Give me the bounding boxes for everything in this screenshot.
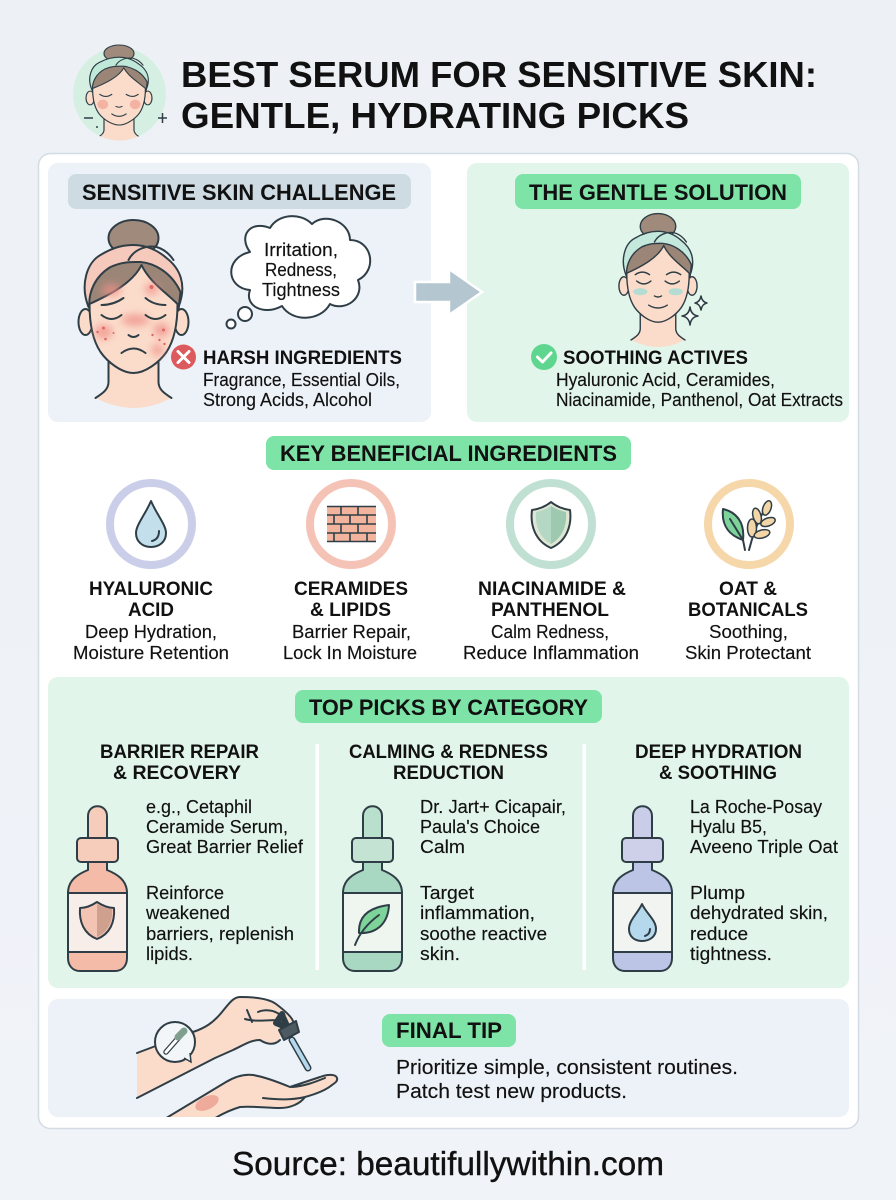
source line: Source: beautifullywithin.com xyxy=(232,1145,664,1182)
thought bubble: irritation, redness, tightness: Redness, xyxy=(265,259,337,280)
thought bubble: irritation, redness, tightness: Tightness xyxy=(262,279,340,300)
column: deep hydration and soothing: Plump xyxy=(690,882,745,903)
ingredient: ceramides and lipids: Lock In Moisture xyxy=(283,642,417,663)
ingredient: ceramides and lipids: CERAMIDES xyxy=(294,578,408,600)
text: final tip advice: Patch test new products. xyxy=(396,1080,627,1103)
column: barrier repair: e.g., Cetaphil xyxy=(146,796,252,817)
column: barrier repair: lipids. xyxy=(146,943,193,964)
column: barrier repair: barriers, replenish xyxy=(146,923,294,944)
icon: header face with headband xyxy=(73,45,167,144)
ingredient: hyaluronic acid: HYALURONIC xyxy=(89,578,213,600)
column: deep hydration and soothing: dehydrated skin, xyxy=(690,902,828,923)
icon: leaf and wheat xyxy=(708,483,790,565)
column: calming and redness reduction: Paula's Choice xyxy=(420,816,540,837)
column: calming and redness reduction: skin. xyxy=(420,943,460,964)
column: barrier repair: & RECOVERY xyxy=(113,762,241,784)
column: deep hydration and soothing: Hyalu B5, xyxy=(690,816,767,837)
title: GENTLE, HYDRATING PICKS xyxy=(181,95,689,136)
column: calming and redness reduction: soothe reactive xyxy=(420,923,547,944)
ingredient: oat and botanicals: Soothing, xyxy=(709,621,788,642)
column: deep hydration and soothing: & SOOTHING xyxy=(659,762,777,784)
panel: final tip xyxy=(48,997,849,1120)
ingredient: ceramides and lipids: Barrier Repair, xyxy=(292,621,411,642)
text: harsh ingredients: HARSH INGREDIENTS xyxy=(203,347,402,369)
text: soothing actives: Hyaluronic Acid, Ceramides, xyxy=(556,369,775,390)
arrow: challenge to solution xyxy=(415,269,482,315)
icon: sparkles xyxy=(682,296,707,325)
column: calming and redness reduction: Dr. Jart+ Cicapair, xyxy=(420,796,566,817)
ingredient: niacinamide and panthenol: Reduce Inflammation xyxy=(463,642,639,663)
ingredient: niacinamide and panthenol: PANTHENOL xyxy=(491,599,609,621)
column: calming and redness reduction: Calm xyxy=(420,836,465,857)
text: final tip advice xyxy=(396,1056,738,1103)
column: deep hydration and soothing: reduce xyxy=(690,923,748,944)
column: calming and redness reduction: REDUCTION xyxy=(393,762,504,784)
column: deep hydration and soothing: Aveeno Triple Oat xyxy=(690,836,838,857)
main card xyxy=(38,154,858,1128)
thought bubble: irritation, redness, tightness xyxy=(226,216,370,328)
ingredient: ceramides and lipids xyxy=(283,483,417,663)
ingredient: hyaluronic acid: Deep Hydration, xyxy=(85,621,217,642)
title xyxy=(181,54,817,136)
column: barrier repair: BARRIER REPAIR xyxy=(100,741,259,763)
column: deep hydration and soothing: tightness. xyxy=(690,943,772,964)
text: harsh ingredients xyxy=(203,347,402,410)
text: harsh ingredients: Strong Acids, Alcohol xyxy=(203,389,372,410)
icon: lavender serum bottle xyxy=(613,806,672,971)
heading: final tip xyxy=(382,1014,516,1047)
icon: irritated face xyxy=(78,220,188,408)
text: final tip advice: Prioritize simple, consistent routines. xyxy=(396,1056,738,1079)
icon: shield xyxy=(510,483,592,565)
title: BEST SERUM FOR SENSITIVE SKIN: xyxy=(181,54,817,95)
heading: key beneficial ingredients xyxy=(266,436,631,470)
column: barrier repair xyxy=(68,741,304,971)
icon: calm face xyxy=(619,214,697,347)
heading: sensitive skin challenge xyxy=(68,174,411,209)
heading: key beneficial ingredients: KEY BENEFICIAL INGREDIENTS xyxy=(280,441,617,466)
text: soothing actives: Niacinamide, Panthenol, Oat Extracts xyxy=(556,389,843,410)
column: barrier repair: weakened xyxy=(145,902,230,923)
text: harsh ingredients: Fragrance, Essential Oils, xyxy=(203,369,400,390)
heading: top picks by category: TOP PICKS BY CATEGORY xyxy=(309,695,588,720)
icon: peach serum bottle xyxy=(68,806,127,971)
text: soothing actives xyxy=(556,347,843,410)
ingredient: oat and botanicals: Skin Protectant xyxy=(685,642,811,663)
column: calming and redness reduction: CALMING & REDNESS xyxy=(349,741,548,763)
ingredient: niacinamide and panthenol xyxy=(463,483,639,663)
column: barrier repair: Ceramide Serum, xyxy=(146,816,288,837)
icon: green serum bottle xyxy=(343,806,402,971)
column: barrier repair: Great Barrier Relief xyxy=(146,836,304,857)
column: deep hydration and soothing: La Roche-Posay xyxy=(690,796,823,817)
ingredient: oat and botanicals: OAT & xyxy=(719,578,777,600)
icon: red x xyxy=(171,344,196,370)
ingredient: ceramides and lipids: & LIPIDS xyxy=(310,599,391,621)
ingredient: niacinamide and panthenol: Calm Redness, xyxy=(491,621,609,642)
heading: final tip: FINAL TIP xyxy=(396,1018,502,1043)
icon: water drop xyxy=(110,483,192,565)
ingredient: niacinamide and panthenol: NIACINAMIDE & xyxy=(478,578,626,600)
ingredient: hyaluronic acid: Moisture Retention xyxy=(73,642,229,663)
column: calming and redness reduction xyxy=(343,741,566,971)
panel: sensitive skin challenge xyxy=(48,163,431,422)
icon: brick wall xyxy=(310,483,392,565)
illustration: hands applying serum xyxy=(137,997,337,1120)
column: calming and redness reduction: Target xyxy=(420,882,474,903)
column: deep hydration and soothing: DEEP HYDRATION xyxy=(635,741,802,763)
ingredient: hyaluronic acid xyxy=(73,483,229,663)
thought bubble: irritation, redness, tightness: Irritation, xyxy=(264,239,338,260)
heading: the gentle solution xyxy=(515,174,801,209)
icon: green check xyxy=(531,344,557,370)
heading: sensitive skin challenge: SENSITIVE SKIN CHALLENGE xyxy=(82,180,396,205)
column: deep hydration and soothing xyxy=(613,741,838,971)
column: calming and redness reduction: inflammation, xyxy=(420,902,535,923)
column: barrier repair: Reinforce xyxy=(146,882,224,903)
panel: top picks by category xyxy=(48,677,849,988)
ingredient: hyaluronic acid: ACID xyxy=(128,599,174,621)
ingredient: oat and botanicals xyxy=(685,483,811,663)
text: soothing actives: SOOTHING ACTIVES xyxy=(563,347,748,369)
ingredient: oat and botanicals: BOTANICALS xyxy=(688,599,808,621)
heading: the gentle solution: THE GENTLE SOLUTION xyxy=(529,180,787,205)
panel: gentle solution xyxy=(467,163,849,422)
